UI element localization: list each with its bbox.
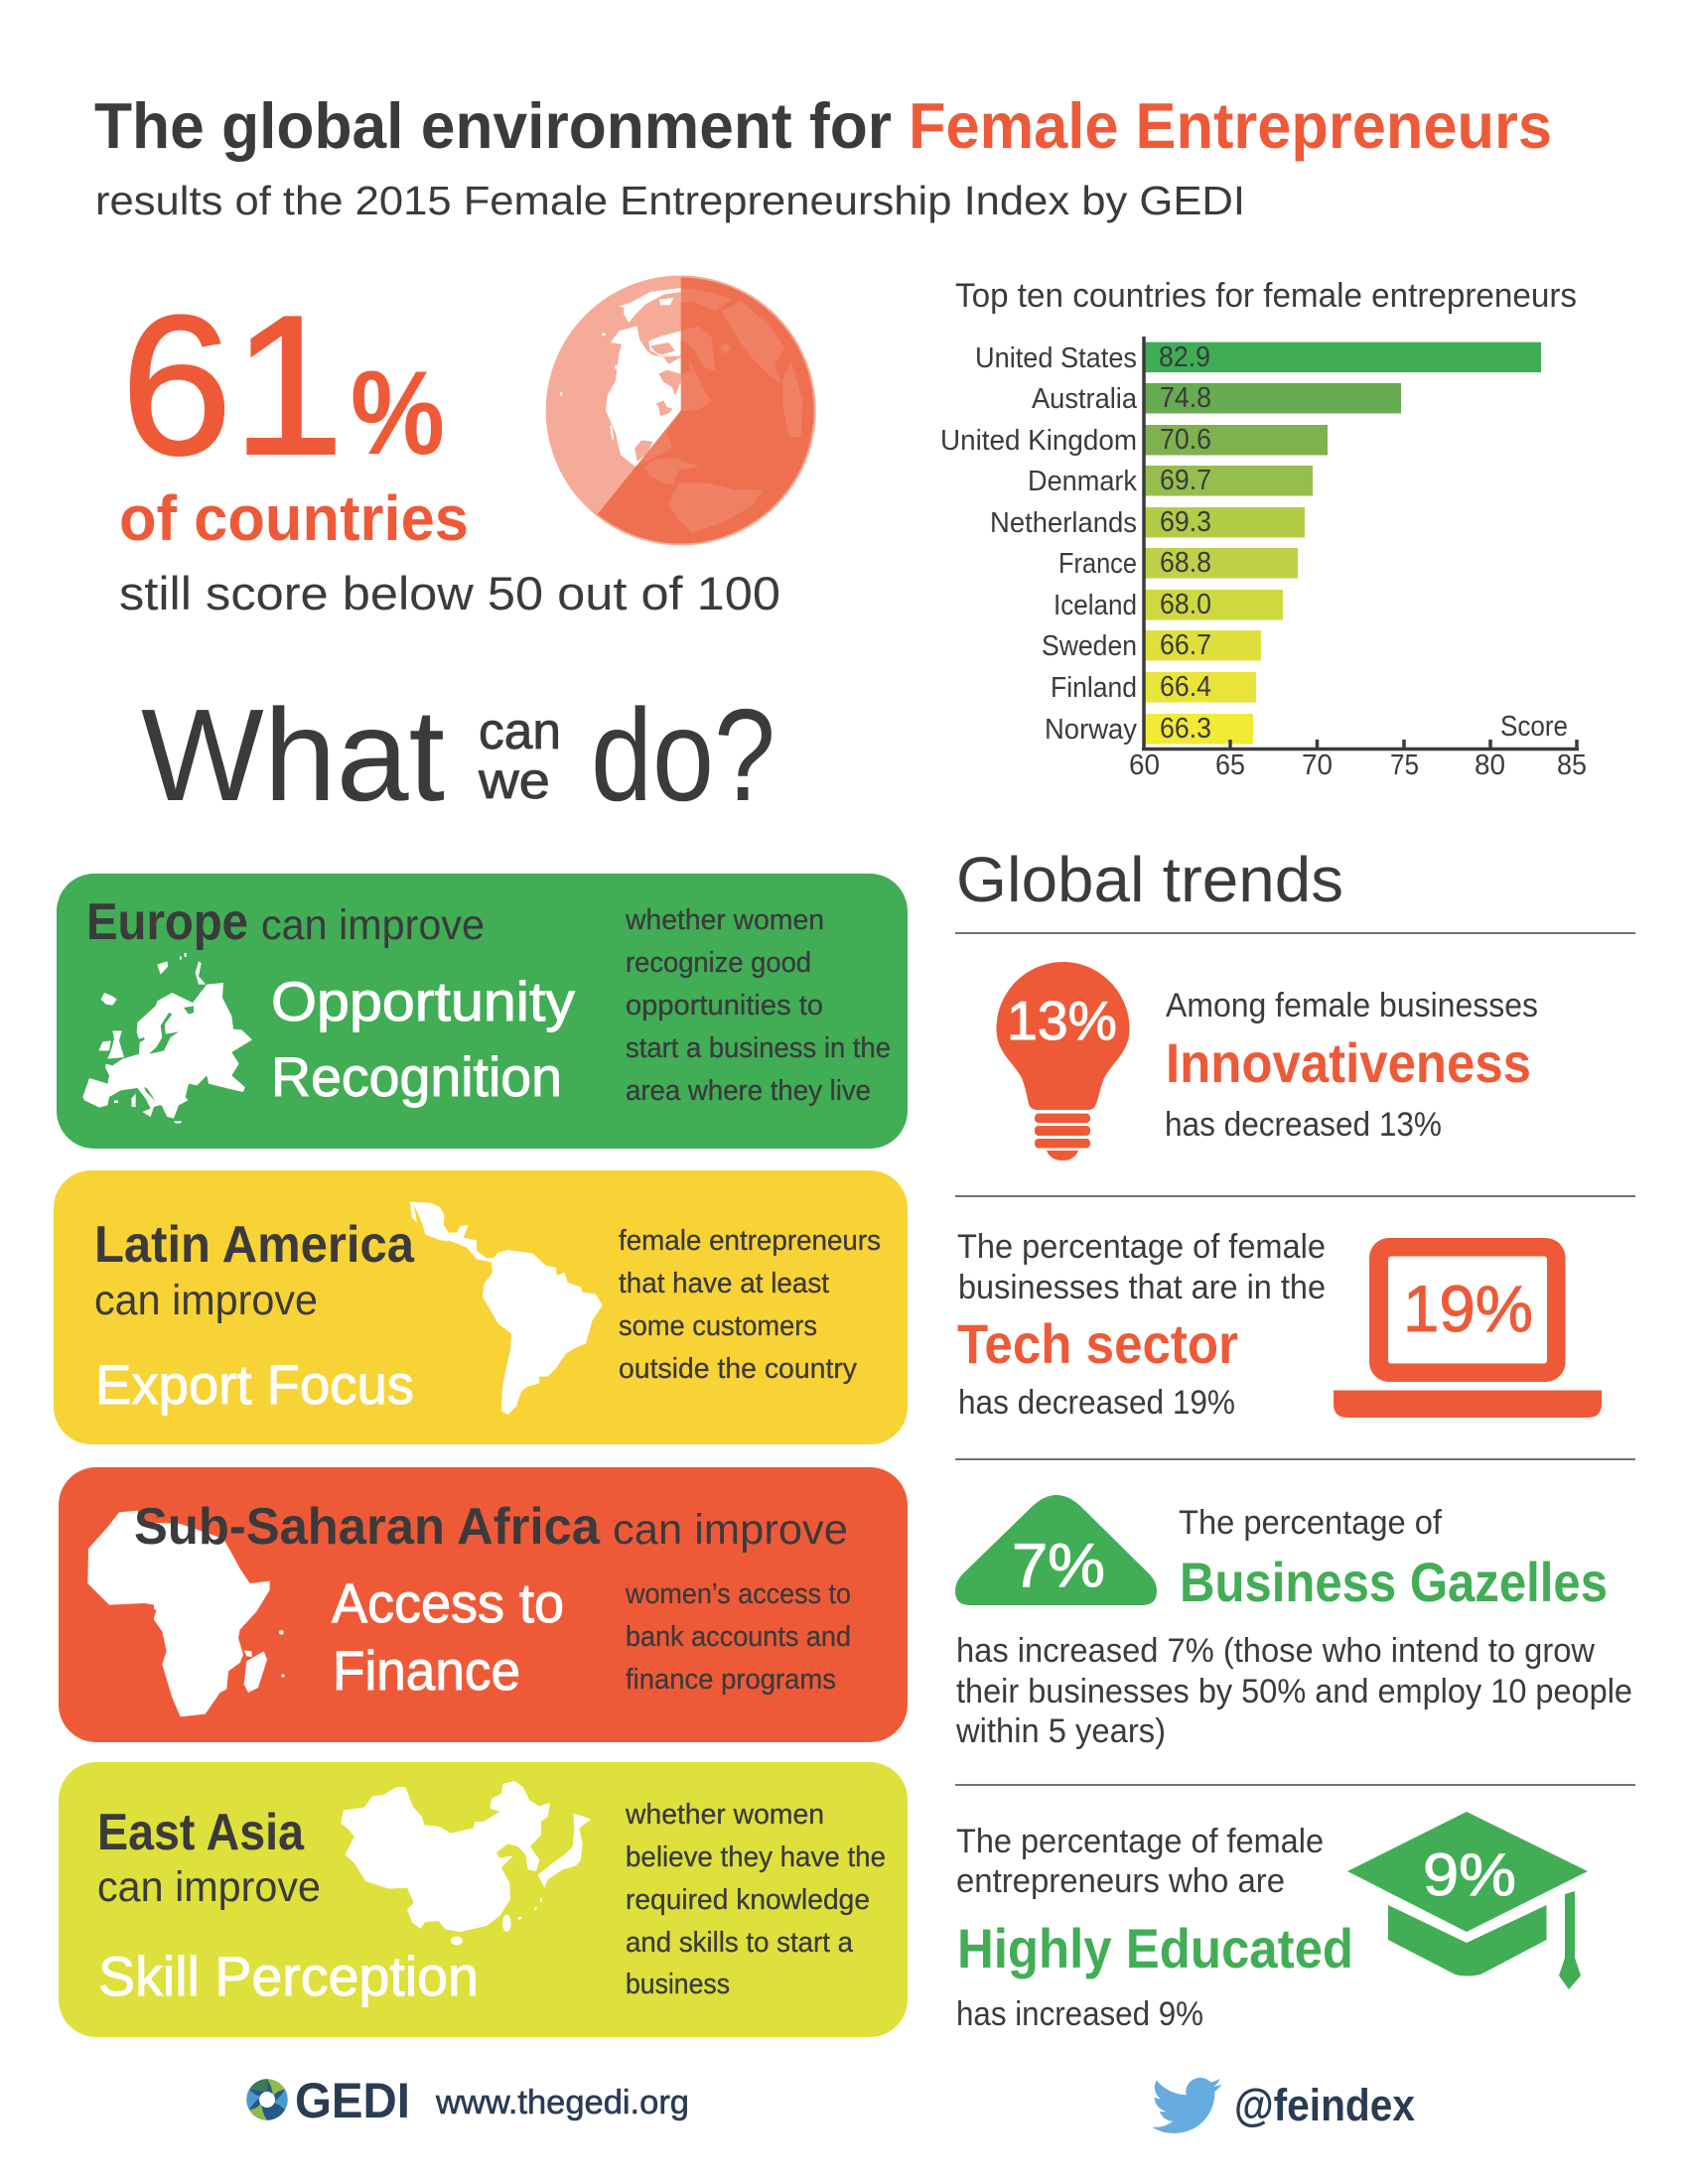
focus: Opportunity Recognition: Opportunity <box>271 970 575 1032</box>
change text <box>955 1632 1632 1750</box>
title: The global environment for <box>94 89 892 162</box>
icon: map of East Asia <box>341 1781 591 1945</box>
chart heading: Top ten countries for female entrepreneurs <box>955 277 1577 315</box>
axis labels: 65 <box>1215 750 1245 781</box>
GEDI wordmark: GEDI <box>295 2073 410 2128</box>
icon: Twitter bird <box>1152 2078 1222 2133</box>
can improve: can improve <box>613 1506 848 1554</box>
lead text: The percentage of female <box>957 1228 1326 1266</box>
bar: Norway: Norway <box>1045 714 1137 746</box>
bar: United States: United States <box>975 342 1137 374</box>
icon: light bulb with 13% <box>997 962 1130 1160</box>
bar: Netherlands: 69.3 <box>1160 506 1211 538</box>
bar: Australia <box>1032 382 1401 415</box>
region name: Europe <box>86 893 248 951</box>
big number 61% <box>121 275 445 496</box>
heading: What can we do?: we <box>478 752 550 810</box>
change text: has decreased 13% <box>1165 1106 1442 1144</box>
icon: triangle with 7% <box>955 1495 1157 1605</box>
lead text: The percentage of <box>1179 1504 1443 1542</box>
icon: graduation cap with 9% <box>1347 1812 1588 1989</box>
description <box>619 1225 881 1385</box>
bar: Denmark: 69.7 <box>1160 465 1211 496</box>
description: some customers <box>619 1310 817 1342</box>
axis labels: Score <box>1500 711 1568 743</box>
heading: What can we do? <box>141 682 775 828</box>
highlight: Highly Educated <box>957 1917 1353 1979</box>
description: area where they live <box>626 1075 871 1107</box>
bar: Sweden: Sweden <box>1042 630 1137 662</box>
icon: map of Europe <box>82 953 252 1124</box>
lead text <box>957 1228 1326 1306</box>
icon: light bulb with 13%: 13% <box>1007 990 1117 1051</box>
region name: East Asia <box>97 1804 305 1861</box>
description: outside the country <box>619 1353 857 1385</box>
panel: top ten countries bar chart <box>940 277 1587 781</box>
of countries: of countries <box>119 482 469 554</box>
bar: France: France <box>1058 548 1137 580</box>
description <box>625 904 891 1107</box>
card background <box>57 874 908 1149</box>
description: women’s access to <box>625 1578 851 1610</box>
change text: their businesses by 50% and employ 10 people <box>956 1673 1632 1710</box>
focus: Skill Perception: Skill Perception <box>98 1945 479 2007</box>
bar: Finland <box>1051 671 1256 704</box>
description: required knowledge <box>626 1884 870 1916</box>
bar: Sweden <box>1042 629 1261 662</box>
heading: Global trends: Global trends <box>956 844 1343 915</box>
lead text: Among female businesses <box>1166 987 1538 1024</box>
bar: Finland: 66.4 <box>1160 671 1211 703</box>
focus: Access to Finance: Access to <box>332 1571 564 1634</box>
description: business <box>626 1969 730 2000</box>
axis labels <box>1129 711 1587 781</box>
icon: globe with 61% wedge <box>546 276 816 546</box>
description: that have at least <box>619 1268 829 1299</box>
description: bank accounts and <box>626 1621 851 1653</box>
subtitle: results of the 2015 Female Entrepreneurship Index by GEDI <box>95 178 1245 223</box>
icon: laptop with 19%: 19% <box>1403 1272 1533 1345</box>
bar: Australia: 74.8 <box>1160 382 1211 414</box>
trend: Business Gazelles <box>955 1495 1632 1750</box>
trend: Tech sector <box>957 1228 1602 1422</box>
bar: Denmark <box>1028 465 1313 497</box>
footer: Twitter handle <box>1152 2078 1415 2133</box>
card background <box>54 1170 908 1444</box>
heading: What can we do?: can <box>479 703 561 760</box>
highlight: Business Gazelles <box>1180 1551 1608 1613</box>
focus: Opportunity Recognition <box>271 970 575 1108</box>
description: recognize good <box>626 947 811 979</box>
still score text: still score below 50 out of 100 <box>119 567 780 619</box>
axis labels: 80 <box>1475 750 1505 781</box>
panel: East Asia <box>59 1762 908 2037</box>
bar: Norway <box>1045 713 1253 746</box>
description: opportunities to <box>626 990 823 1022</box>
bar: Finland: Finland <box>1051 672 1137 704</box>
panel: Sub-Saharan Africa <box>59 1467 908 1742</box>
description: believe they have the <box>626 1842 886 1873</box>
region name: Sub-Saharan Africa <box>134 1498 601 1556</box>
description <box>625 1578 851 1696</box>
change text: has decreased 19% <box>958 1384 1235 1422</box>
description: whether women <box>625 904 824 936</box>
panel: 61 percent statistic <box>119 275 816 619</box>
description: start a business in the <box>626 1032 891 1064</box>
region name: Latin America <box>94 1216 415 1274</box>
bar: United States <box>975 341 1541 374</box>
trend: Innovativeness <box>997 962 1538 1160</box>
website: www.thegedi.org <box>435 2084 689 2121</box>
axis labels: 70 <box>1302 750 1333 781</box>
change text: within 5 years) <box>955 1712 1166 1750</box>
bar: Norway: 66.3 <box>1160 713 1211 745</box>
description: and skills to start a <box>626 1927 854 1959</box>
card background <box>59 1762 908 2037</box>
bar: Netherlands <box>990 506 1305 539</box>
bar: United States: 82.9 <box>1159 341 1210 373</box>
big number 61%: 61 <box>121 275 344 496</box>
can improve: can improve <box>261 901 485 949</box>
bar: United Kingdom <box>940 424 1328 457</box>
card background <box>59 1467 908 1742</box>
description: female entrepreneurs <box>619 1225 881 1257</box>
title: Female Entrepreneurs <box>909 89 1552 162</box>
change text: has increased 9% <box>956 1995 1203 2033</box>
title <box>94 89 1552 162</box>
bar: France <box>1058 547 1298 580</box>
description <box>625 1799 886 2000</box>
change text: has increased 7% (those who intend to grow <box>956 1632 1595 1670</box>
lead text: The percentage of female <box>956 1823 1324 1860</box>
icon: GEDI swirl logo <box>246 2079 288 2120</box>
icon: triangle with 7%: 7% <box>1012 1532 1105 1600</box>
footer: GEDI logo and website <box>246 2073 689 2128</box>
axis labels: 75 <box>1390 750 1419 781</box>
description: whether women <box>625 1799 824 1831</box>
lead text: businesses that are in the <box>958 1269 1326 1306</box>
heading: What can we do?: What <box>141 682 445 828</box>
trend: Highly Educated <box>956 1812 1588 2033</box>
bar: Australia: Australia <box>1032 383 1138 415</box>
lead text <box>956 1823 1324 1900</box>
bar: Iceland <box>1054 589 1283 621</box>
description: finance programs <box>626 1664 836 1696</box>
icon: graduation cap with 9%: 9% <box>1423 1842 1516 1908</box>
bar: Denmark: Denmark <box>1028 466 1137 497</box>
focus: Access to Finance: Finance <box>333 1639 520 1702</box>
bar: Iceland: 68.0 <box>1160 589 1211 620</box>
handle: @feindex <box>1234 2080 1415 2130</box>
icon: map of Africa <box>87 1511 285 1716</box>
panel: Latin America <box>54 1170 908 1444</box>
panel: Europe <box>57 874 908 1149</box>
focus: Access to Finance <box>332 1571 564 1702</box>
highlight: Tech sector <box>957 1312 1238 1375</box>
bar: United Kingdom: 70.6 <box>1160 424 1211 456</box>
bar: United Kingdom: United Kingdom <box>940 425 1137 457</box>
icon: laptop with 19% <box>1334 1238 1602 1418</box>
focus: Opportunity Recognition: Recognition <box>271 1045 562 1108</box>
highlight: Innovativeness <box>1166 1031 1531 1094</box>
focus: Export Focus: Export Focus <box>95 1353 414 1416</box>
can improve: can improve <box>94 1277 318 1324</box>
bar: France: 68.8 <box>1160 547 1211 579</box>
lead text: entrepreneurs who are <box>956 1862 1285 1900</box>
can improve: can improve <box>97 1863 321 1911</box>
icon: map of Latin America <box>410 1202 603 1415</box>
axis labels: 85 <box>1557 750 1587 781</box>
axis labels: 60 <box>1129 750 1160 781</box>
heading: What can we do?: do? <box>591 682 775 828</box>
big number 61%: % <box>351 346 445 479</box>
bar: Netherlands: Netherlands <box>990 507 1137 539</box>
chart axes <box>1142 337 1579 751</box>
bar: Iceland: Iceland <box>1054 590 1137 621</box>
bar: Sweden: 66.7 <box>1160 629 1211 661</box>
